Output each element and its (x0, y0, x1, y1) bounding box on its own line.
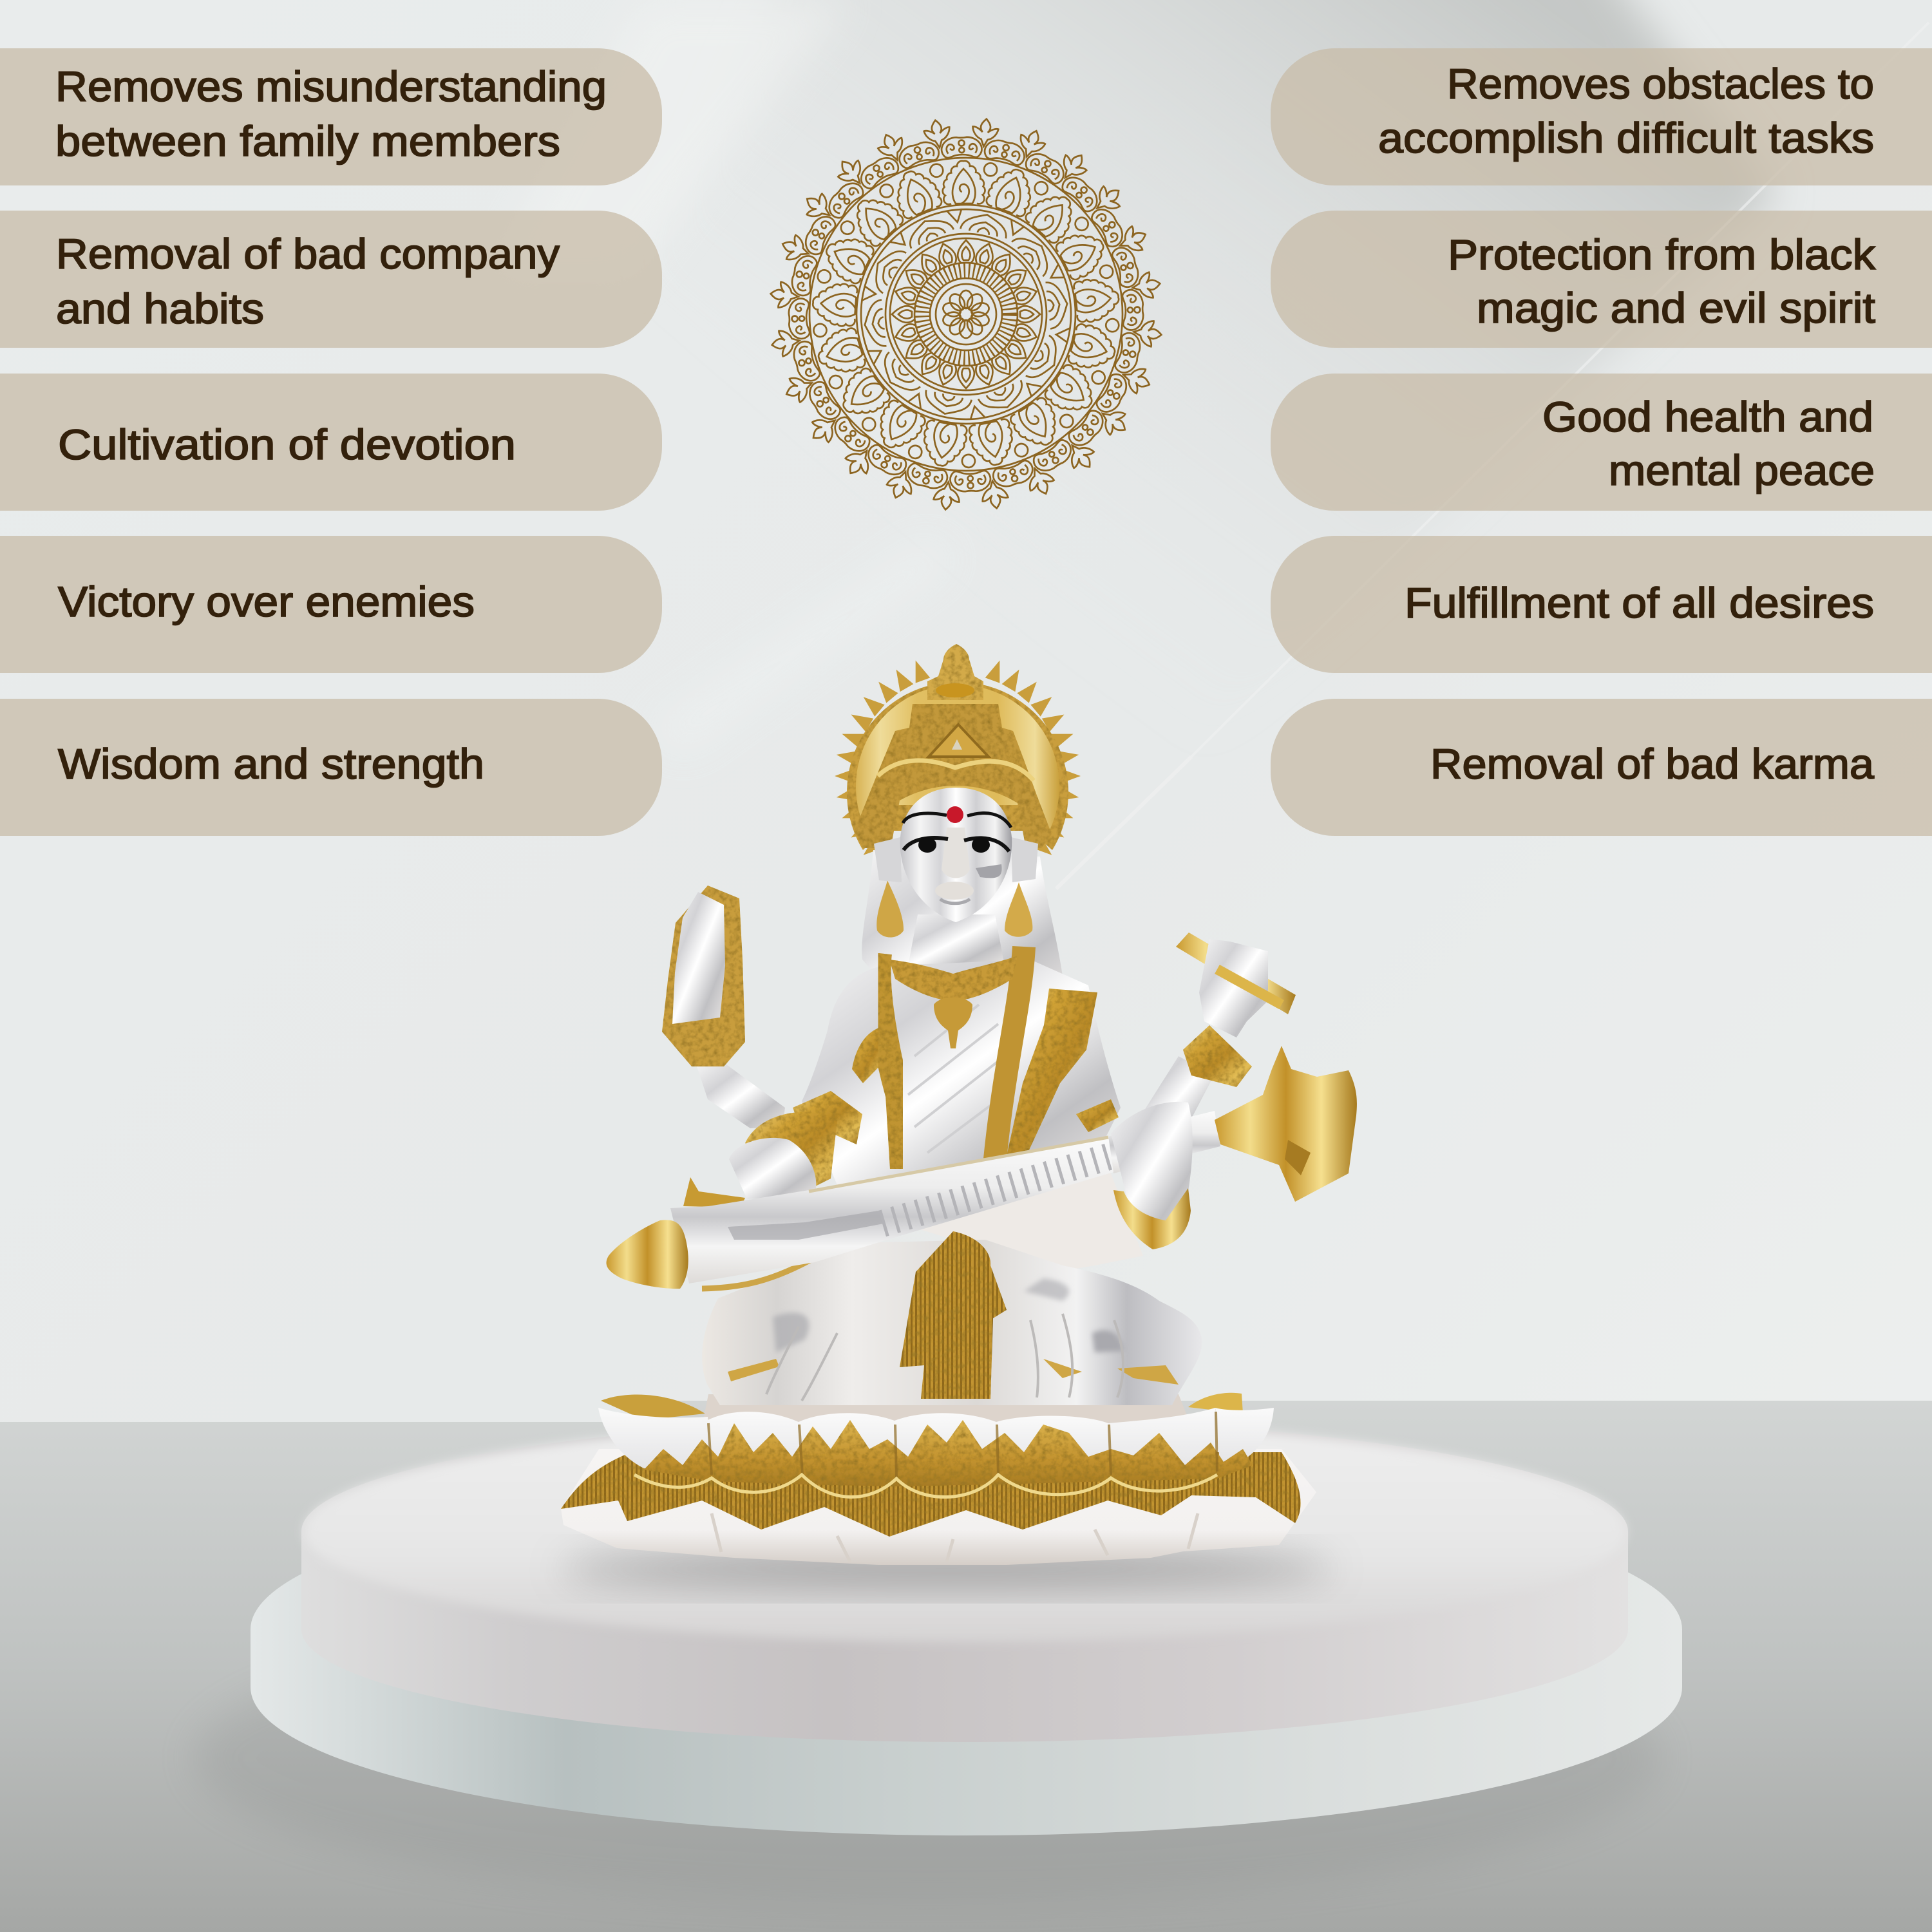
pill: removal of bad company: Removal of bad company (56, 230, 560, 278)
peacock head detail (1285, 1140, 1311, 1175)
pill: removal of bad company (0, 211, 662, 348)
pill: cultivation of devotion (0, 374, 662, 511)
pill: removes obstacles (1271, 48, 1932, 185)
side hair silver (874, 837, 902, 882)
left scarf (852, 1025, 889, 1083)
statue of Saraswati (560, 644, 1357, 1588)
pill: removal of bad company: and habits (56, 285, 264, 332)
left hand bangle (745, 1112, 837, 1191)
lotus base folds (712, 1513, 1198, 1562)
string edge (809, 1137, 1108, 1191)
pill: cultivation of devotion: Cultivation of devotion (58, 421, 516, 468)
right bracelet (1183, 1025, 1252, 1087)
bright scalloped rim (634, 1475, 1217, 1497)
lips (935, 882, 974, 900)
pill: removes obstacles: Removes obstacles to (1447, 60, 1874, 108)
crown tiers (855, 704, 1052, 848)
pill: wisdom and strength (0, 699, 662, 836)
mandala ornament (692, 40, 1240, 589)
brows (903, 813, 1011, 828)
pill: victory over enemies: Victory over enemies (58, 578, 475, 625)
bindi (947, 806, 963, 823)
face (874, 788, 1038, 922)
platform shadow (193, 1613, 1662, 1903)
upper lotus petals (598, 1408, 1274, 1497)
upper drum side (301, 1419, 1628, 1742)
floor (0, 1401, 1932, 1932)
sari folds (908, 1005, 1005, 1153)
background glass reflections (489, 0, 1929, 889)
chrome streak (728, 1211, 884, 1240)
pill: removes misunderstanding: Removes misunderstanding (55, 62, 607, 110)
pill: fulfillment of desires (1271, 536, 1932, 673)
leg gold flecks (728, 1359, 1179, 1385)
right necklace chain (995, 947, 1024, 1159)
pill: protection from black magic: magic and evil spirit (1477, 284, 1875, 332)
pill: protection from black magic (1271, 211, 1932, 348)
pill: removes misunderstanding: between family members (55, 117, 560, 165)
frets (882, 1156, 1111, 1224)
gold peacock head (1215, 1046, 1357, 1202)
right elbow gold (1113, 1188, 1191, 1249)
pill: protection from black magic: Protection from black (1448, 231, 1876, 278)
left hand with manuscript (662, 886, 745, 1066)
chrome patches on legs (773, 1278, 1124, 1352)
pill: removes obstacles: accomplish difficult tasks (1378, 114, 1874, 162)
halo polished disc (856, 685, 1059, 837)
lower plate (251, 1480, 1682, 1835)
statue contact shadow (560, 1549, 1333, 1588)
crown (855, 644, 1052, 848)
flower centre (942, 290, 990, 338)
left raised arm (697, 1063, 785, 1128)
collar necklace (889, 956, 1018, 1001)
right raised arm (1140, 1056, 1214, 1143)
pill: removes misunderstanding (0, 48, 662, 185)
tuning peg (683, 1177, 745, 1208)
left benefit pills (0, 48, 662, 836)
crossed legs (702, 1240, 1202, 1405)
nose (942, 828, 970, 878)
right thigh drape behind veena (902, 1166, 1143, 1272)
pill: removal of bad karma: Removal of bad karma (1430, 740, 1874, 788)
halo teeth (835, 658, 1081, 861)
neck (908, 914, 1005, 966)
petal separators (708, 1412, 1217, 1478)
left hand (729, 1138, 816, 1199)
halo rim (847, 682, 1068, 850)
right hand (1199, 939, 1268, 1037)
finial (927, 644, 983, 700)
book strap (1217, 969, 1282, 1005)
eyes (904, 838, 1009, 851)
back petals (601, 1394, 705, 1420)
book behind right hand (1176, 933, 1296, 1014)
gold tip (607, 1220, 688, 1289)
leg fold lines (766, 1314, 1123, 1401)
pendant (934, 998, 972, 1048)
torso (802, 960, 1121, 1185)
halo (835, 658, 1081, 861)
pill: fulfillment of desires: Fulfillment of all desires (1405, 579, 1874, 627)
left armlet (793, 1091, 862, 1144)
pill: good health (1271, 374, 1932, 511)
outer paisley and tip ring (692, 40, 1240, 589)
cheek shadow (976, 864, 1002, 878)
gold sash (900, 1231, 1007, 1399)
middle band (860, 205, 1072, 424)
pill: victory over enemies (0, 536, 662, 673)
resonator and neck (670, 1136, 1113, 1283)
pill: good health: Good health and (1542, 393, 1873, 440)
lotus base (561, 1393, 1316, 1565)
pill: good health: mental peace (1609, 446, 1875, 494)
left necklace chain (878, 953, 903, 1169)
gold flames on petals (644, 1420, 1253, 1486)
earrings (876, 880, 1032, 938)
right armlet (1076, 1099, 1119, 1132)
platform (193, 1419, 1682, 1903)
scalloped petal ring (810, 160, 1122, 471)
neck extension (1108, 1111, 1220, 1173)
right gold shawl (1007, 989, 1097, 1156)
veil and hair (862, 850, 1063, 1005)
pill: removal of bad karma (1271, 699, 1932, 836)
crown centre triangle (929, 724, 989, 757)
veena (607, 1046, 1357, 1289)
right hand on veena (1111, 1102, 1193, 1233)
pill: wisdom and strength: Wisdom and strength (58, 740, 484, 788)
upper drum top (304, 1421, 1625, 1642)
inner petal ring (870, 230, 1056, 412)
lower gold petals (561, 1452, 1301, 1537)
drape gold edge (702, 1256, 818, 1289)
lotus seat (702, 1394, 1191, 1426)
crown lower tier line (878, 761, 1034, 781)
right benefit pills (1271, 48, 1932, 836)
